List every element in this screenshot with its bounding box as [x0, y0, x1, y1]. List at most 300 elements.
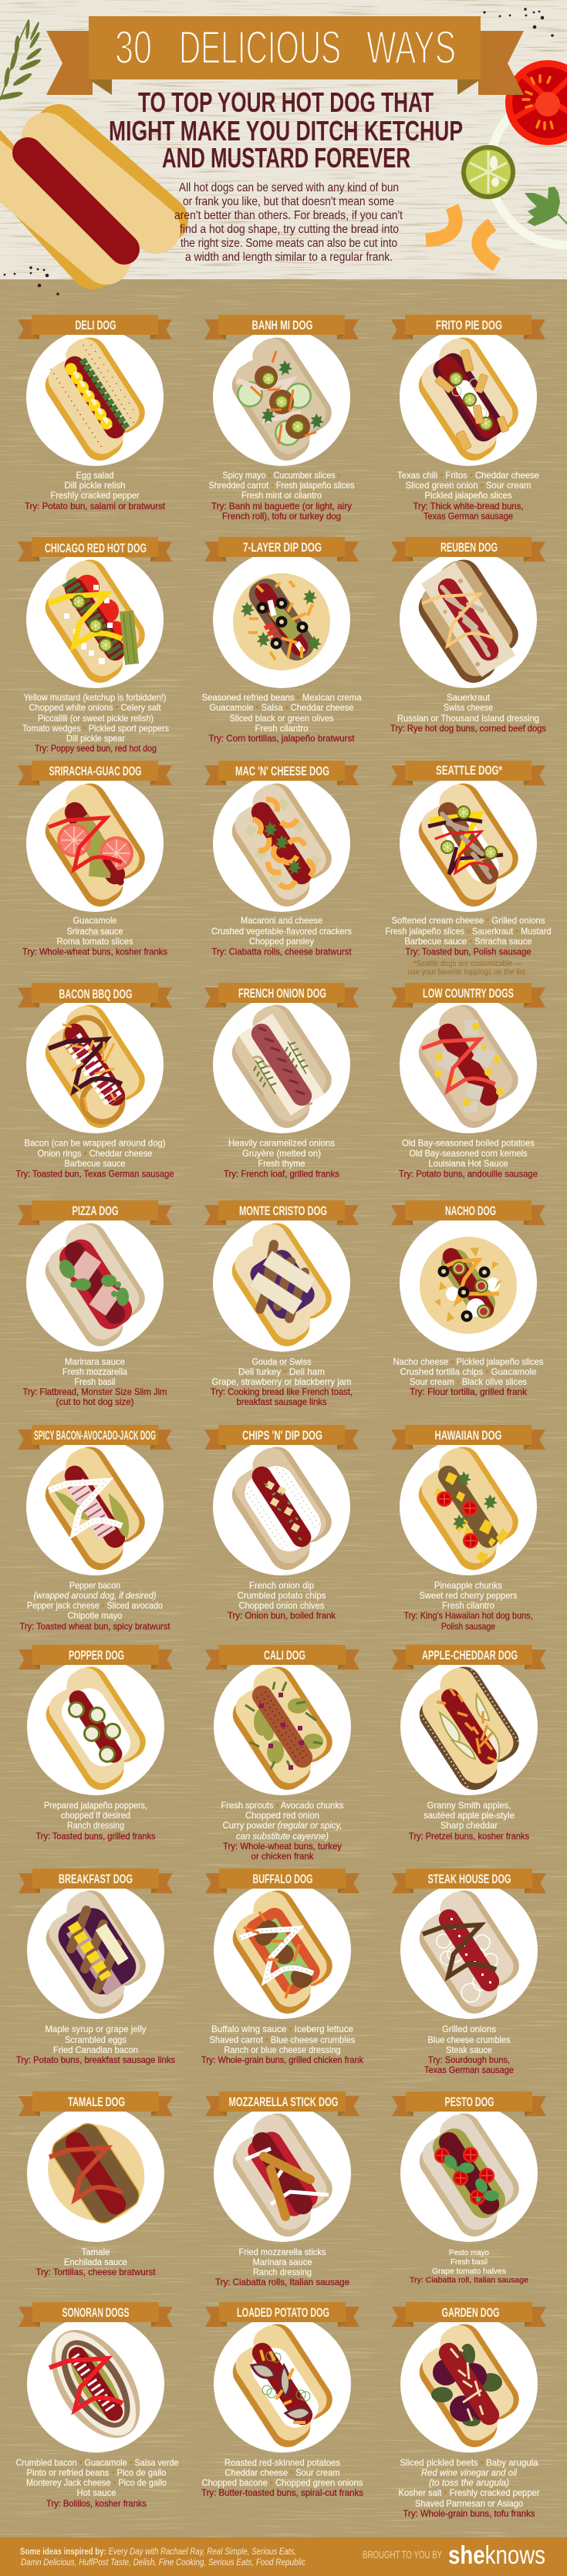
ribbon heading: LOW COUNTRY DOGS [423, 987, 514, 1001]
ingredients [22, 915, 167, 957]
ribbon heading: SRIRACHA-GUAC DOG [49, 765, 142, 778]
card: loaded potato dog [201, 2302, 363, 2498]
ingredients [35, 1800, 156, 1842]
ribbon heading: DELI DOG [76, 319, 116, 333]
ingredients: Ranch or blue cheese dressing [224, 2044, 341, 2055]
ribbon heading: REUBEN DOG [440, 541, 498, 555]
intro paragraph: find a hot dog shape, try cutting the bread into [180, 223, 399, 236]
ingredients: Egg salad [76, 470, 114, 481]
ingredients: Sliced pickled beets • Baby arugula [400, 2457, 538, 2468]
ingredients: Try: Sourdough buns, [428, 2054, 510, 2065]
illustration: jalapeño slice [461, 145, 515, 199]
ingredients: Sriracha sauce [66, 926, 123, 937]
ribbon heading: STEAK HOUSE DOG [427, 1872, 511, 1886]
ingredients: Freshly cracked pepper [51, 490, 140, 501]
plate and hot dog [26, 329, 164, 467]
ingredients: Piccalilli (or sweet pickle relish) [38, 713, 154, 724]
ingredients: Cheddar cheese • Sour cream [225, 2467, 339, 2478]
ingredients: Guacamole [73, 915, 117, 926]
ribbon heading [205, 2302, 359, 2327]
illustration: pepper specks [4, 8, 554, 295]
ingredients [25, 470, 166, 511]
ribbon heading: CHICAGO RED HOT DOG [45, 542, 147, 555]
plate and hot dog [214, 2315, 351, 2453]
ingredients: Try: King's Hawaiian hot dog buns, [404, 1610, 532, 1621]
ingredients: Red wine vinegar and oil [421, 2467, 517, 2478]
plate and hot dog [214, 1882, 351, 2020]
ingredients [393, 1356, 543, 1397]
ribbon heading [391, 315, 545, 339]
ingredients: Try: Potato bun, salami or bratwurst [25, 501, 166, 511]
plate and hot dog [26, 996, 164, 1134]
ingredients: Chipotle mayo [68, 1610, 123, 1621]
ribbon heading: LOADED POTATO DOG [237, 2306, 329, 2320]
card: chicago red hot dog [18, 537, 172, 754]
ingredients: Pineapple chunks [434, 1580, 502, 1591]
ingredients [211, 915, 352, 957]
ribbon heading [204, 983, 359, 1008]
ribbon heading [392, 2302, 546, 2327]
ribbon heading: FRENCH ONION DOG [238, 987, 326, 1001]
ribbon heading [19, 1869, 173, 1893]
ingredients: Texas German sausage [424, 511, 513, 522]
ingredients: Try: Butter-toasted buns, spiral-cut franks [201, 2487, 363, 2498]
ribbon heading [392, 1869, 546, 1893]
ingredients: Chopped bacone • Chopped green onions [202, 2477, 363, 2488]
card: sriracha-guac dog [18, 761, 172, 957]
card: garden dog [392, 2302, 546, 2519]
sources: Damn Delicious, HuffPost Taste, Delish, Fine Cooking, Serious Eats, Food Republic [21, 2557, 305, 2568]
ribbon heading: PESTO DOG [444, 2095, 494, 2109]
ingredients: Try: Onion bun, boiled frank [228, 1610, 336, 1621]
ingredients: Shaved carrot • Blue cheese crumbles [210, 2034, 355, 2045]
intro paragraph: the right size. Some meats can also be cut into [181, 237, 397, 250]
subtitle [109, 86, 463, 174]
ribbon heading: MAC 'N' CHEESE DOG [235, 765, 329, 778]
ingredients: Fresh sprouts • Avocado chunks [221, 1800, 344, 1811]
ingredients: Monterey Jack cheese • Pico de gallo [26, 2477, 167, 2488]
ingredients: Bacon (can be wrapped around dog) [25, 1137, 165, 1148]
ingredients: Shaved Parmesan or Asiago [415, 2498, 523, 2509]
ingredients: Try: Rye hot dog buns, corned beef dogs [390, 723, 546, 734]
ingredients: Louisiana Hot Sauce [429, 1158, 508, 1169]
ribbon heading: FRITO PIE DOG [436, 319, 502, 333]
plate and hot dog [400, 775, 537, 913]
brand credit: sheknows [448, 2541, 545, 2569]
ribbon heading [18, 983, 172, 1008]
ingredients: Ranch dressing [253, 2267, 312, 2277]
plate and hot dog [27, 2105, 164, 2242]
title banner: DELICIOUS [179, 22, 341, 73]
ingredients: Nacho cheese • Pickled jalapeño slices [393, 1356, 543, 1367]
ingredients: Try: Ciabatta roll, Italian sausage [410, 2276, 528, 2285]
card: mac 'n' cheese dog [204, 761, 359, 957]
ribbon heading [204, 1425, 359, 1450]
illustration: macaroni pieces [426, 207, 497, 265]
ribbon heading [19, 2092, 173, 2116]
ribbon heading: BREAKFAST DOG [59, 1872, 133, 1886]
ingredients: Old Bay-seasoned boiled potatoes [402, 1137, 535, 1148]
ribbon heading [392, 2092, 546, 2116]
ingredients: Pepper jack cheese • Sliced avocado [27, 1600, 163, 1611]
ingredients [404, 1580, 532, 1632]
ingredients: Dill pickle spear [66, 733, 125, 744]
ingredients: Prepared jalapeño poppers, [44, 1800, 147, 1811]
ingredients: Swiss cheese [444, 702, 493, 713]
plate and hot dog [214, 2105, 351, 2243]
ingredients: Sour cream • Black olive slices [410, 1376, 527, 1387]
ingredients: Old Bay-seasoned corn kernels [409, 1148, 528, 1159]
ingredients: Gruyère (melted on) [242, 1148, 321, 1159]
card: pizza dog [18, 1200, 172, 1407]
ribbon heading: CALI DOG [264, 1649, 305, 1663]
card: 7-layer dip dog [202, 537, 362, 744]
ribbon heading: TAMALE DOG [68, 2095, 125, 2109]
ingredients [208, 470, 355, 522]
ingredients: Macaroni and cheese [241, 915, 322, 926]
ingredients: Try: Ciabatta rolls, cheese bratwurst [211, 946, 352, 957]
plate and hot dog [213, 551, 350, 688]
ingredients [22, 692, 169, 754]
ingredients: or chicken frank [251, 1851, 314, 1862]
ingredients: Try: Potato buns, andouille sausage [399, 1168, 538, 1179]
plate and hot dog [27, 1658, 164, 1796]
ingredients [221, 1800, 344, 1862]
card: pesto dog [392, 2092, 546, 2285]
card: apple-cheddar dog [392, 1645, 546, 1842]
card: reuben dog [390, 537, 546, 734]
ingredients: Chopped red onion [245, 1810, 319, 1821]
sources [20, 2546, 305, 2568]
ingredients: Kosher salt • Freshly cracked pepper [398, 2487, 540, 2498]
ingredients: Fresh mint or cilantro [241, 490, 322, 501]
ingredients: Onion rings • Cheddar cheese [37, 1148, 153, 1159]
ingredients [399, 1137, 538, 1179]
ribbon heading [391, 761, 545, 785]
ingredients [386, 915, 551, 977]
card: chips 'n' dip dog [204, 1425, 359, 1621]
ingredients: Try: Cooking bread like French toast, [211, 1386, 353, 1397]
plate and hot dog [400, 1438, 537, 1576]
ingredients: Pickled jalapeño slices [424, 490, 512, 501]
ingredients: Try: Poppy seed bun, red hot dog [35, 743, 157, 754]
ingredients [201, 2024, 364, 2065]
ingredients: Try: Flour tortilla, grilled frank [410, 1386, 528, 1397]
ingredients [410, 2248, 528, 2285]
ribbon heading: APPLE-CHEDDAR DOG [422, 1649, 518, 1663]
plate and hot dog [400, 329, 537, 467]
ingredients: Try: Whole-wheat buns, turkey [223, 1841, 342, 1852]
ingredients: Pinto or refried beans • Pico de gallo [26, 2467, 167, 2478]
intro paragraph: aren't better than others. For breads, if you can't [174, 209, 403, 222]
ingredients: Sliced black or green olives [230, 713, 333, 724]
plate and hot dog [400, 1658, 538, 1796]
ingredients: Tomato wedges • Pickled sport peppers [22, 723, 169, 734]
ribbon heading [204, 761, 359, 785]
ribbon heading [205, 1869, 359, 1893]
ribbon heading [18, 1200, 172, 1225]
ingredients: Try: Tortillas, cheese bratwurst [35, 2267, 156, 2277]
title banner [46, 16, 524, 95]
ingredients [16, 2024, 175, 2065]
ingredients: Texas chili • Fritos • Cheddar cheese [397, 470, 539, 481]
ribbon heading [18, 315, 172, 339]
ingredients: Chopped parsley [249, 936, 314, 947]
card: mozzarella stick dog [205, 2092, 359, 2287]
card: seattle dog [386, 761, 551, 977]
footer [0, 2537, 567, 2576]
ingredients: Try: French loaf, grilled franks [224, 1168, 339, 1179]
intro paragraph: a width and length similar to a regular frank. [185, 251, 393, 264]
ribbon heading [392, 1645, 546, 1670]
card: frito pie dog [391, 315, 545, 522]
ribbon heading [204, 315, 359, 339]
ribbon heading: CHIPS 'N' DIP DOG [242, 1429, 322, 1443]
ingredients: Dill pickle relish [65, 480, 125, 491]
ingredients: Russian or Thousand Island dressing [397, 713, 539, 724]
ingredients: Fresh cilantro [442, 1600, 494, 1611]
ribbon heading [391, 1425, 545, 1450]
illustration: tomato slice [505, 60, 567, 145]
ingredients: (wrapped around dog, if desired) [34, 1590, 157, 1601]
subtitle: AND MUSTARD FOREVER [162, 142, 410, 174]
title banner: WAYS [366, 22, 456, 73]
ingredients: Polish sausage [441, 1621, 495, 1632]
ingredients [202, 692, 362, 744]
ribbon heading: MONTE CRISTO DOG [239, 1204, 327, 1218]
ribbon heading [391, 983, 545, 1008]
ingredients: Gouda or Swiss [251, 1356, 312, 1367]
ingredients [211, 1356, 353, 1407]
card: bacon bbq dog [15, 983, 174, 1179]
ingredients: Try: Whole-wheat buns, kosher franks [22, 946, 167, 957]
ingredients: Fresh basil [74, 1376, 116, 1387]
ingredients: Try: Pretzel buns, kosher franks [409, 1831, 529, 1842]
ribbon heading: BACON BBQ DOG [59, 988, 133, 1001]
ingredients [215, 2247, 349, 2287]
plate and hot dog [213, 775, 350, 913]
intro paragraph: or frank you like, but that doesn't mean some [183, 195, 394, 208]
ingredients: Guacamole • Salsa • Cheddar cheese [210, 702, 354, 713]
ingredients [15, 1137, 174, 1179]
ribbon heading: SPICY BACON-AVOCADO-JACK DOG [34, 1429, 156, 1443]
ingredients: Roma tomato slices [57, 936, 133, 947]
ingredients: (to toss the arugula) [429, 2477, 509, 2488]
ingredients [23, 1356, 167, 1407]
ingredients: Crushed tortilla chips • Guacamole [400, 1366, 537, 1377]
ingredients: Pepper bacon [69, 1580, 120, 1591]
plate and hot dog [400, 2105, 538, 2243]
intro paragraph [174, 181, 403, 264]
ingredients: Scrambled eggs [65, 2034, 127, 2045]
ingredients: Blue cheese crumbles [427, 2034, 511, 2045]
ingredients: Try: Toasted bun, Polish sausage [406, 946, 532, 957]
ingredients: Maple syrup or grape jelly [45, 2024, 147, 2034]
ribbon heading [19, 1645, 173, 1670]
ingredients [15, 2457, 179, 2509]
ingredients: Try: Ciabatta rolls, Italian sausage [215, 2277, 349, 2287]
ingredients: French roll), tofu or turkey dog [222, 511, 341, 522]
subtitle: TO TOP YOUR HOT DOG THAT [138, 86, 434, 118]
card: low country dogs [391, 983, 545, 1179]
plate and hot dog [400, 996, 537, 1134]
ingredients: Yellow mustard (ketchup is forbidden!) [23, 692, 167, 703]
ribbon heading: SEATTLE DOG* [436, 764, 502, 778]
plate and hot dog [26, 551, 164, 689]
plate and hot dog [213, 1438, 350, 1576]
ingredients: Crumbled bacon • Guacamole • Salsa verde [15, 2457, 179, 2468]
illustration: parsley leaf [525, 187, 567, 226]
ingredients: sautéed apple pie-style [424, 1810, 515, 1821]
plate and hot dog [27, 2314, 164, 2453]
card: nacho dog [391, 1200, 545, 1397]
ingredients: Fresh thyme [258, 1158, 305, 1169]
ribbon heading [204, 537, 359, 562]
ribbon heading: 7-LAYER DIP DOG [243, 541, 322, 555]
plate and hot dog [213, 329, 350, 467]
ingredients: *Seattle dogs are customizable — [413, 959, 521, 968]
ribbon heading: HAWAIIAN DOG [435, 1429, 501, 1443]
ingredients: Try: Potato buns, breakfast sausage links [16, 2054, 175, 2065]
ingredients: Grape, strawberry or blackberry jam [211, 1376, 352, 1387]
ingredients: Fresh jalapeño slices • Sauerkraut • Mustard [386, 926, 551, 937]
ingredients [398, 2457, 540, 2519]
ingredients [224, 1137, 339, 1179]
ingredients: Sauerkraut [447, 692, 491, 703]
card: sonoran dogs [15, 2302, 179, 2509]
ingredients: Try: Bolillos, kosher franks [46, 2498, 147, 2509]
ribbon heading: MOZZARELLA STICK DOG [228, 2095, 338, 2109]
ingredients: Shredded carrot • Fresh jalapeño slices [208, 480, 355, 491]
ingredients: Fresh basil [451, 2257, 488, 2267]
ingredients: Sweet red cherry peppers [420, 1590, 517, 1601]
brand credit [363, 2541, 545, 2569]
card: buffalo dog [201, 1869, 364, 2065]
ingredients: Try: Whole-grain buns, tofu franks [403, 2508, 535, 2519]
card: french onion dog [204, 983, 359, 1179]
ingredients: Try: Corn tortillas, jalapeño bratwurst [208, 733, 355, 744]
card: steak house dog [392, 1869, 546, 2075]
ribbon heading: PIZZA DOG [73, 1204, 119, 1218]
ingredients: Steak sauce [446, 2044, 492, 2055]
ingredients: Tamale [82, 2247, 110, 2257]
ingredients: Deli turkey • Deli ham [238, 1366, 325, 1377]
ingredients: Fresh mozzarella [62, 1366, 127, 1377]
ingredients [424, 2024, 514, 2075]
illustration: rosemary sprig [0, 19, 42, 101]
ingredients: (cut to hot dog size) [56, 1396, 134, 1407]
ribbon heading [205, 2092, 359, 2116]
ribbon heading: BANH MI DOG [251, 319, 313, 333]
ingredients [20, 1580, 170, 1632]
plate and hot dog [26, 1438, 164, 1576]
card: spicy bacon-avocado-jack dog [18, 1425, 172, 1632]
ingredients [397, 470, 539, 522]
ingredients: chopped if desired [61, 1810, 130, 1821]
ribbon heading: POPPER DOG [69, 1649, 124, 1663]
ingredients: Fresh cilantro [255, 723, 309, 734]
ingredients: use your favorite toppings on the list. [407, 967, 528, 977]
ingredients: Grilled onions [442, 2024, 496, 2034]
ingredients: Ranch dressing [67, 1820, 124, 1831]
ribbon heading [391, 537, 545, 562]
card: breakfast dog [16, 1869, 175, 2065]
plate and hot dog [27, 1882, 164, 2020]
ingredients: Texas German sausage [424, 2065, 514, 2075]
card: monte cristo dog [204, 1200, 359, 1407]
plate and hot dog [400, 1214, 537, 1352]
ribbon heading: BUFFALO DOG [253, 1872, 313, 1886]
ingredients: Chopped onion chives [239, 1600, 324, 1611]
ingredients: Try: Toasted bun, Texas German sausage [15, 1168, 174, 1179]
ribbon heading [205, 1645, 359, 1670]
illustration: onion ring [487, 88, 567, 248]
ingredients: Fried mozzarella sticks [239, 2247, 326, 2257]
ribbon heading [18, 537, 172, 562]
ingredients: Try: Toasted wheat bun, spicy bratwurst [20, 1621, 170, 1632]
illustration: big hot dog [0, 127, 165, 266]
ribbon heading [391, 1200, 545, 1225]
card: hawaiian dog [391, 1425, 545, 1632]
ingredients: Roasted red-skinned potatoes [224, 2457, 340, 2468]
ingredients: Crushed vegetable-flavored crackers [211, 926, 352, 937]
ribbon heading [18, 1425, 172, 1450]
ingredients [390, 692, 546, 734]
card: tamale dog [19, 2092, 173, 2277]
ingredients: Sharp cheddar [440, 1820, 498, 1831]
ingredients: Try: Thick white-bread buns, [413, 501, 523, 511]
ribbon heading: SONORAN DOGS [62, 2306, 130, 2320]
ingredients: Pesto mayo [449, 2248, 489, 2257]
ingredients: Sliced green onion • Sour cream [406, 480, 531, 491]
plate and hot dog [400, 2315, 538, 2453]
ingredients: Curry powder (regular or spicy, [222, 1820, 343, 1831]
ingredients: Try: Banh mi baguette (or light, airy [211, 501, 352, 511]
ingredients: Granny Smith apples, [427, 1800, 511, 1811]
ingredients: can substitute cayenne) [236, 1831, 329, 1842]
intro paragraph: All hot dogs can be served with any kind of bun [179, 181, 399, 194]
plate and hot dog [400, 1882, 538, 2020]
ingredients: Try: Whole-grain buns, grilled chicken frank [201, 2054, 364, 2065]
plate and hot dog [400, 551, 537, 689]
ingredients: Barbecue sauce [65, 1158, 126, 1169]
ingredients: Barbecue sauce • Sriracha sauce [404, 936, 532, 947]
plate and hot dog [213, 1214, 350, 1352]
card: banh mi dog [204, 315, 359, 522]
card: deli dog [18, 315, 172, 511]
ingredients [201, 2457, 363, 2498]
ingredients: breakfast sausage links [236, 1396, 327, 1407]
sources: Some ideas inspired by: Every Day with Rachael Ray, Real Simple, Serious Eats, [20, 2546, 296, 2557]
title banner: 30 [115, 22, 152, 73]
brand credit: BROUGHT TO YOU BY [363, 2548, 442, 2561]
ingredients: Enchilada sauce [64, 2257, 127, 2267]
plate and hot dog [214, 1658, 351, 1796]
ribbon heading: NACHO DOG [445, 1204, 496, 1218]
ingredients: Try: Flatbread, Monster Size Slim Jim [23, 1386, 167, 1397]
ribbon heading [18, 761, 172, 785]
ingredients: Seasoned refried beans • Mexican crema [202, 692, 362, 703]
ingredients: Marinara sauce [65, 1356, 125, 1367]
ingredients: Fried Canadian bacon [53, 2044, 138, 2055]
ingredients: Try: Toasted buns, grilled franks [35, 1831, 156, 1842]
plate and hot dog [26, 1214, 164, 1352]
ingredients: Buffalo wing sauce • Iceberg lettuce [211, 2024, 353, 2034]
ingredients: Marinara sauce [253, 2257, 312, 2267]
ingredients: Spicy mayo • Cucumber slices • [222, 470, 341, 481]
ingredients [35, 2247, 156, 2277]
ingredients: Crumbled potato chips [238, 1590, 326, 1601]
